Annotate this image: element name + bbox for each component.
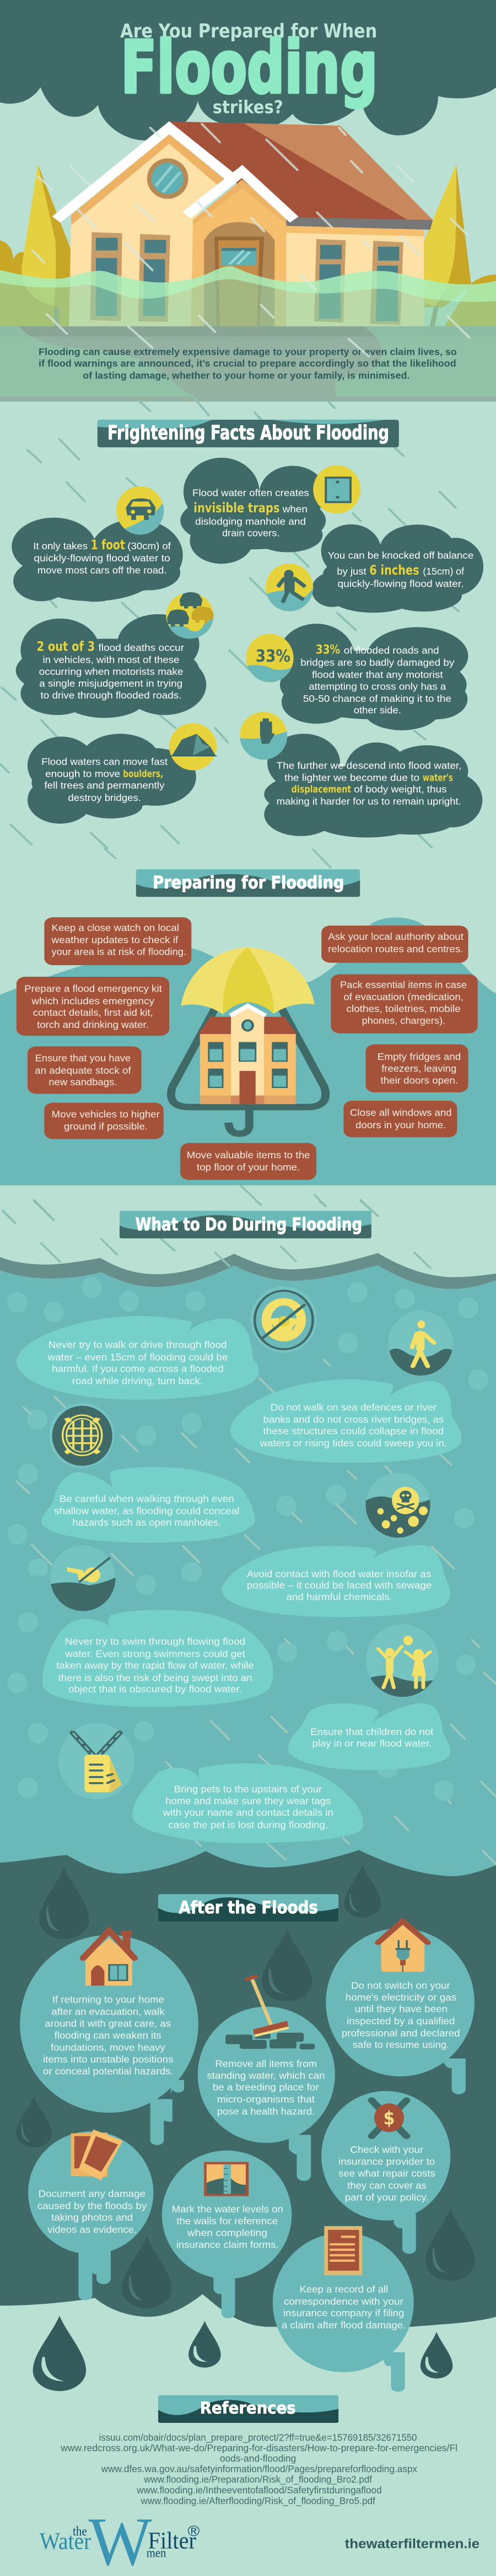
icon: walking in water	[389, 1311, 454, 1377]
fact: knocked off balance: 6 inches	[369, 562, 419, 578]
icon: no swimming	[49, 1545, 117, 1612]
fact: 33 percent: 50-50 chance of making it to the	[303, 693, 451, 704]
fact: knocked off balance: You can be knocked off balance	[328, 550, 473, 561]
water swirls	[0, 326, 496, 397]
tip: returning home: foundations, move heavy	[51, 2043, 165, 2053]
title: Are You Prepared for When	[120, 20, 377, 42]
tip: insurance: insurance provider to	[338, 2157, 435, 2167]
tip: electricity: Do not switch on your	[351, 1980, 450, 1991]
tip: returning home: after an evacuation, walk	[52, 2007, 165, 2017]
icon: broom	[225, 1976, 315, 2049]
hills backdrop	[0, 918, 496, 1186]
bushes and trees	[0, 164, 496, 329]
fact: knocked off balance: by just	[337, 566, 366, 577]
tip: children: Ensure that children do not	[310, 1726, 433, 1737]
tip: electricity	[326, 1921, 475, 2095]
tip: document damage: caused by the floods by	[37, 2201, 147, 2211]
tip: records: a claim after flood damage.	[282, 2320, 406, 2330]
tip: records	[273, 2226, 414, 2391]
tip: returning home: flooding can weaken its	[55, 2031, 161, 2041]
tip: sea defences: these structures could collapse in flood	[263, 1426, 444, 1437]
tip text: your area is at risk of flooding.	[52, 947, 186, 957]
tip: electricity: until they have been	[354, 2004, 448, 2015]
reference links	[60, 2432, 457, 2506]
dark cloud lower edge	[0, 2248, 496, 2327]
storm cloud	[0, 0, 496, 140]
tip: returning home: If returning to your home	[52, 1995, 164, 2005]
section: after the floods	[0, 1865, 496, 2318]
tip text: their doors open.	[381, 1075, 458, 1086]
intro text: of lasting damage, whether to your home or your family, is minimised.	[83, 370, 409, 381]
fact: flood deaths: flood deaths occur	[99, 642, 184, 653]
tip: avoid contact: and harmful chemicals.	[286, 1592, 392, 1603]
heading: references	[158, 2395, 338, 2423]
icon: water level wall	[204, 2162, 249, 2196]
background rain drops	[16, 1865, 475, 2308]
heading: frightening facts	[98, 420, 399, 447]
reference links: www.flooding.ie/Afterflooding/Risk_of_flooding_Bro5.pdf	[141, 2496, 375, 2506]
tip: sea defences: Do not walk on sea defences or river	[271, 1403, 436, 1413]
logo: Water	[40, 2528, 91, 2555]
heading: references: References	[200, 2399, 296, 2417]
fact: 33 percent: flood water that any motorist	[312, 669, 443, 680]
fact: boulders: enough to move	[45, 768, 120, 779]
road	[0, 326, 496, 400]
fact: flood deaths: in vehicles, with most of these	[42, 654, 179, 665]
tip text: Prepare a flood emergency kit	[24, 984, 162, 994]
heading: preparing	[136, 869, 360, 897]
icon: no steering wheel	[251, 1286, 317, 1352]
tip: document damage	[28, 2129, 153, 2301]
fact: flood deaths	[16, 592, 215, 718]
tip: never swim: taken away by the rapid flow of water, while	[56, 1660, 254, 1671]
fact: invisible traps	[180, 458, 360, 564]
tip: never swim: Never try to swim through flowing flood	[65, 1636, 245, 1647]
tip: do not drive: harmful. If you come across a flooded	[52, 1364, 224, 1374]
tip: insurance: Check with your	[350, 2145, 423, 2155]
tip: pets: with your name and contact details in	[163, 1807, 333, 1818]
tip text: weather updates to check if	[51, 935, 179, 945]
tip: electricity: inspected by a qualified	[347, 2016, 455, 2027]
tip: document damage: Document any damage	[38, 2189, 145, 2199]
tip: never swim	[42, 1610, 273, 1707]
tip: standing water	[198, 1976, 335, 2181]
logo: Filter	[148, 2528, 196, 2553]
hero section	[0, 0, 496, 400]
icon: house with plug	[378, 1921, 428, 1972]
fact: 33 percent: attempting to cross only has a	[309, 681, 446, 692]
tip text: Ask your local authority about	[328, 932, 463, 942]
tip: never swim: there is also the risk of being swept into an	[58, 1672, 252, 1683]
tip text: Pack essential items in case	[340, 980, 467, 991]
icon: raised hand	[240, 712, 288, 761]
section: during flooding (lower)	[0, 1545, 496, 1884]
tip text: an adequate stock of	[35, 1065, 131, 1076]
reference links: oods-and-flooding	[220, 2453, 296, 2464]
fact: 33 percent: bridges are so badly damaged by	[300, 657, 455, 668]
tip text: Ensure that you have	[35, 1053, 131, 1064]
tip text: clothes, toiletries, mobile	[347, 1004, 461, 1014]
dark cloud top edge	[0, 1850, 496, 1924]
tip text: doors in your home.	[355, 1120, 446, 1130]
tip: pets	[132, 1763, 363, 1843]
title: strikes?	[213, 96, 283, 117]
tip boxes	[17, 917, 478, 1180]
fact: knocked off balance	[266, 524, 483, 613]
tip: insurance: they can cover as	[347, 2180, 427, 2191]
logo	[40, 2503, 200, 2576]
tip: records: correspondence with your	[284, 2296, 403, 2307]
fact: knocked off balance: quickly-flowing flood water.	[337, 578, 463, 589]
tip text: freezers, leaving	[381, 1064, 456, 1074]
fact: boulders: Flood waters can move fast	[41, 756, 168, 767]
tip: pets: Bring pets to the upstairs of your	[174, 1783, 322, 1794]
tip: do not drive: Never try to walk or drive through flood	[48, 1340, 227, 1350]
icon: dollar and wrenches	[371, 2100, 407, 2136]
tip: water levels: Mark the water levels on	[172, 2204, 283, 2215]
tip: insurance	[321, 2091, 450, 2254]
icon: car	[116, 486, 164, 534]
fact: displacement: The further we descend into flood water,	[277, 760, 461, 771]
fact: invisible traps: when	[282, 504, 308, 515]
tip: standing water: pose a health hazard.	[217, 2107, 315, 2117]
tip: insurance: part of your policy.	[345, 2193, 429, 2203]
tip: records: insurance company if filing	[283, 2308, 405, 2319]
tip: do not drive: road while driving, turn back.	[72, 1376, 203, 1387]
fact: 33 percent: 33%	[316, 643, 340, 657]
fact: cars: move most cars off the road.	[37, 565, 166, 576]
icon: manhole cover	[313, 465, 360, 513]
icon: falling drops	[33, 2316, 452, 2391]
tip text: new sandbags.	[48, 1077, 117, 1087]
icon: 33 percent badge	[246, 634, 294, 683]
tip text: phones, chargers).	[362, 1016, 445, 1026]
section: frightening facts	[0, 397, 496, 848]
tip: do not drive	[17, 1316, 259, 1400]
icon: boulder	[169, 723, 217, 770]
tip: returning home: or conceal potential hazards.	[43, 2066, 174, 2077]
tip: document damage: videos as evidence.	[47, 2225, 137, 2235]
tip: avoid contact: possible – it could be laced with sewage	[247, 1580, 432, 1591]
icon: open manhole	[49, 1403, 114, 1468]
tip: shallow water	[41, 1467, 255, 1543]
tip: electricity: safe to resume using.	[353, 2040, 449, 2050]
tip: avoid contact: Avoid contact with flood water insofar as	[247, 1568, 431, 1579]
fact: boulders: destroy bridges.	[68, 792, 141, 803]
tip: children: play in or near flood water.	[312, 1738, 432, 1749]
tip: returning home: items into unstable positions	[43, 2054, 174, 2065]
darker wave crest	[0, 1253, 496, 1289]
icon: umbrella over house	[171, 947, 326, 1134]
tip: do not drive: water – even 15cm of flooding could be	[47, 1352, 228, 1363]
intro text	[39, 347, 457, 381]
title	[120, 20, 378, 117]
fact: displacement: making it harder for us to remain upright.	[277, 795, 461, 807]
fact: displacement: water's	[423, 772, 453, 783]
tip text: torch and drinking water.	[37, 1020, 149, 1030]
tip text: which includes emergency	[31, 996, 154, 1006]
fact: boulders: fell trees and permanently	[44, 780, 165, 791]
tip: standing water: standing water, which can	[207, 2071, 325, 2081]
fact: 33 percent: other side.	[354, 705, 401, 716]
tip: document damage: taking photos and	[51, 2213, 133, 2223]
tip: sea defences	[230, 1379, 462, 1463]
tip: insurance: see what repair costs	[338, 2168, 435, 2179]
section: references and footer	[33, 2226, 479, 2576]
tip: records: Keep a record of all	[300, 2284, 388, 2295]
tip: shallow water: shallow water, as flooding could conceal	[54, 1506, 240, 1517]
tip: returning home	[20, 1931, 198, 2145]
icon: 33 percent badge: 33%	[256, 646, 290, 666]
tip: returning home: around it with great care, as	[45, 2018, 171, 2029]
tip: pets: case the pet is lost during flooding.	[168, 1819, 328, 1830]
logo: men	[147, 2546, 166, 2560]
section: during flooding (upper)	[0, 1201, 496, 1587]
icon: toxic water skull	[364, 1473, 432, 1539]
flood water crest	[0, 266, 496, 302]
fact: cars: 1 foot	[91, 537, 125, 553]
teal water background	[0, 1265, 496, 1587]
heading: during flooding: What to Do During Flooding	[136, 1214, 362, 1235]
tip text: relocation routes and centres.	[328, 944, 463, 955]
icon: three cars	[166, 592, 215, 640]
fact: invisible traps: Flood water often creates	[192, 487, 309, 498]
tip: avoid contact	[222, 1545, 450, 1617]
fact: knocked off balance: (15cm) of	[423, 566, 465, 577]
tip: sea defences: waters or rising tides could sweep you in.	[260, 1438, 447, 1449]
section: preparing for flooding	[0, 848, 496, 1222]
tip text: Move vehicles to higher	[52, 1110, 160, 1120]
tip text: contact details, first aid kit,	[33, 1008, 153, 1018]
tip: electricity: home's electricity or gas	[346, 1993, 456, 2003]
tip: water levels: the walls for reference	[176, 2216, 278, 2227]
tip text: Move valuable items to the	[187, 1150, 310, 1161]
tip: water levels	[162, 2151, 292, 2318]
tip: sea defences: banks and do not cross river bridges, as	[263, 1415, 444, 1425]
tip text: Close all windows and	[350, 1108, 452, 1118]
logo: ®	[187, 2523, 200, 2540]
fact: cars: (30cm) of	[127, 540, 171, 551]
heading: after the floods: After the Floods	[179, 1897, 318, 1918]
tip: standing water: be a breeding place for	[213, 2082, 319, 2093]
fact: invisible traps: drain covers.	[222, 527, 279, 538]
fact: 33 percent	[246, 624, 468, 730]
fact: 33 percent: of flooded roads and	[344, 645, 439, 656]
fact: displacement: of body weight, thus	[354, 783, 446, 794]
tip: electricity: professional and declared	[342, 2028, 460, 2039]
tip: water levels: when completing	[187, 2228, 267, 2238]
icon: children playing	[364, 1624, 441, 1697]
fact: boulders: boulders,	[123, 769, 163, 780]
icon: photographs	[71, 2129, 123, 2180]
heading: preparing: Preparing for Flooding	[153, 873, 344, 892]
fact: flood deaths: to drive through flooded roads.	[40, 690, 181, 701]
tip: water levels: insurance claim forms.	[176, 2240, 279, 2250]
heading: during flooding	[120, 1211, 371, 1238]
fact: cars: It only takes	[33, 540, 88, 551]
fact: flood deaths: 2 out of 3	[37, 638, 95, 654]
tip text: ground if possible.	[64, 1122, 148, 1132]
logo: the	[73, 2524, 87, 2539]
icon: person in water	[266, 564, 315, 613]
icon: document	[324, 2226, 362, 2275]
icon: pet tag	[58, 1723, 134, 1799]
tip: shallow water: hazards such as open manholes.	[72, 1518, 221, 1528]
heading: after the floods	[158, 1894, 338, 1922]
fact: boulders	[28, 723, 217, 824]
tip: never swim: object that is obscured by flood water.	[68, 1684, 242, 1695]
fact: cars: quickly-flowing flood water to	[34, 553, 170, 564]
tip text: of evacuation (medication,	[343, 992, 463, 1003]
tip text: Keep a close watch on local	[52, 923, 179, 933]
fact: flood deaths: occurring when motorists make	[39, 666, 183, 677]
tip text: Empty fridges and	[378, 1052, 461, 1062]
fact: displacement: the lighter we become due to	[284, 772, 419, 783]
tip: pets: home and make sure they wear tags	[165, 1795, 331, 1806]
tip: shallow water: Be careful when walking through even	[60, 1494, 234, 1505]
tip: never swim: water. Even strong swimmers could get	[64, 1648, 245, 1659]
fact: displacement	[240, 712, 482, 837]
tip text	[24, 923, 467, 1173]
icon: house with chimney	[83, 1931, 134, 1985]
tip: standing water: Remove all items from	[215, 2059, 317, 2069]
fact: invisible traps: invisible traps	[193, 500, 279, 516]
tip: children	[288, 1703, 450, 1770]
fact: cars	[12, 486, 183, 602]
tip text: top floor of your home.	[197, 1162, 300, 1173]
reference links: www.flooding.ie/Preparation/Risk_of_flooding_Bro2.pdf	[143, 2474, 373, 2485]
flood water overlay	[0, 279, 496, 329]
house	[56, 121, 433, 328]
fact: flood deaths: a single misjudgement in trying	[39, 678, 182, 689]
icon: dollar and wrenches: $	[384, 2108, 395, 2129]
fact: displacement: displacement	[292, 784, 351, 795]
tip: standing water: micro-organisms that	[217, 2095, 315, 2105]
fact: invisible traps: dislodging manhole and	[195, 516, 306, 527]
